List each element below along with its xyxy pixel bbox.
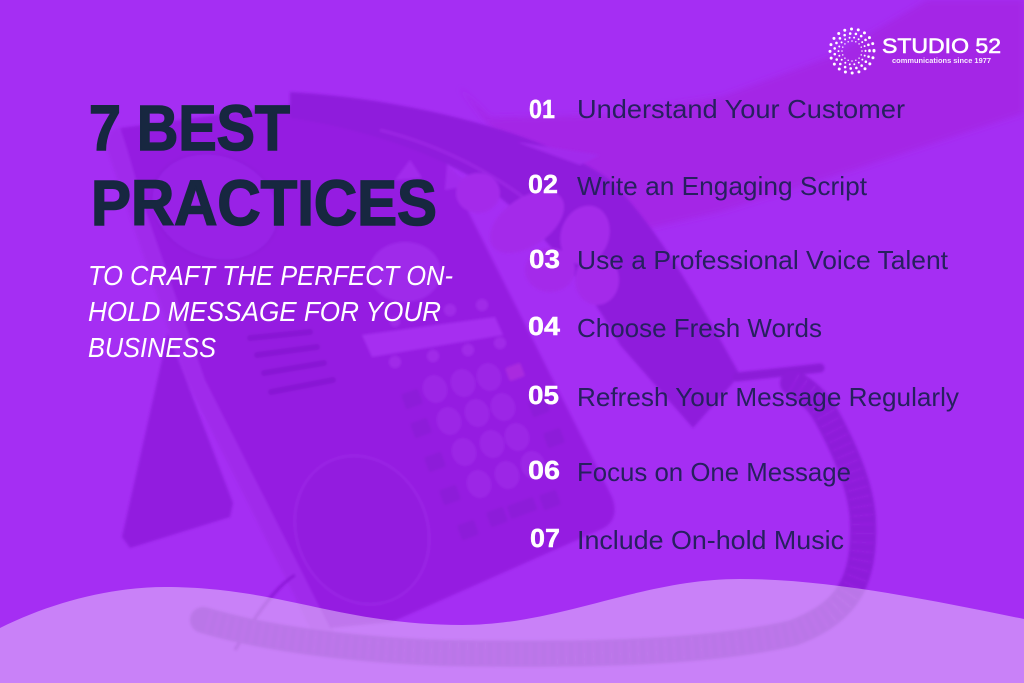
subtitle: TO CRAFT THE PERFECT ON-: [88, 260, 453, 291]
keypad: [419, 360, 549, 501]
item 05: 05: [528, 380, 559, 410]
phone stand: [122, 333, 233, 548]
list of practices: [528, 94, 959, 555]
item 06: 06: [528, 455, 560, 485]
subtitle: [88, 260, 453, 363]
item 06: Focus on One Message: [577, 457, 851, 487]
item 04: Choose Fresh Words: [577, 313, 822, 343]
logo tagline: communications since 1977: [892, 56, 991, 65]
item 07: 07: [530, 523, 560, 553]
title: 7 BEST: [89, 92, 290, 164]
cord coils: [203, 383, 863, 654]
item 02: 02: [528, 169, 558, 199]
item 03: Use a Professional Voice Talent: [577, 245, 949, 275]
handset: [290, 92, 740, 428]
item 05: Refresh Your Message Regularly: [577, 382, 959, 412]
subtitle: BUSINESS: [88, 332, 216, 363]
item 07: Include On-hold Music: [577, 525, 844, 555]
title: PRACTICES: [91, 167, 437, 239]
handset cord connector: [737, 368, 820, 377]
logo wordmark: STUDIO 52: [882, 35, 1001, 58]
item 03: 03: [529, 244, 560, 274]
phone side band: [107, 128, 335, 632]
item 04: 04: [528, 311, 561, 341]
title: [89, 92, 437, 239]
bottom wave: [0, 579, 1024, 683]
red key: [505, 363, 525, 381]
speaker slots: [250, 332, 333, 392]
logo: Studio 52: [830, 29, 1001, 73]
light gaps on handset: [395, 142, 600, 190]
handset highlight: [380, 130, 545, 215]
item 02: Write an Engaging Script: [577, 171, 868, 201]
side panel right of keypad: [369, 242, 441, 302]
soft key row: [389, 299, 506, 368]
fingers: [456, 173, 619, 305]
phone body face: [120, 105, 615, 628]
handset cradle: [136, 136, 294, 278]
microphone ring: [271, 434, 453, 626]
subtitle: HOLD MESSAGE FOR YOUR: [88, 296, 441, 327]
icon: dotted sunburst: [830, 29, 874, 73]
photo: hand holding phone handset: [107, 92, 863, 654]
item 01: 01: [529, 94, 555, 124]
display strip: [362, 317, 503, 357]
item 01: Understand Your Customer: [577, 94, 905, 124]
curly cord lead: [235, 575, 295, 650]
coiled cord: [203, 383, 863, 654]
sleeve and arm: [460, 0, 1024, 235]
function buttons: [401, 388, 565, 541]
